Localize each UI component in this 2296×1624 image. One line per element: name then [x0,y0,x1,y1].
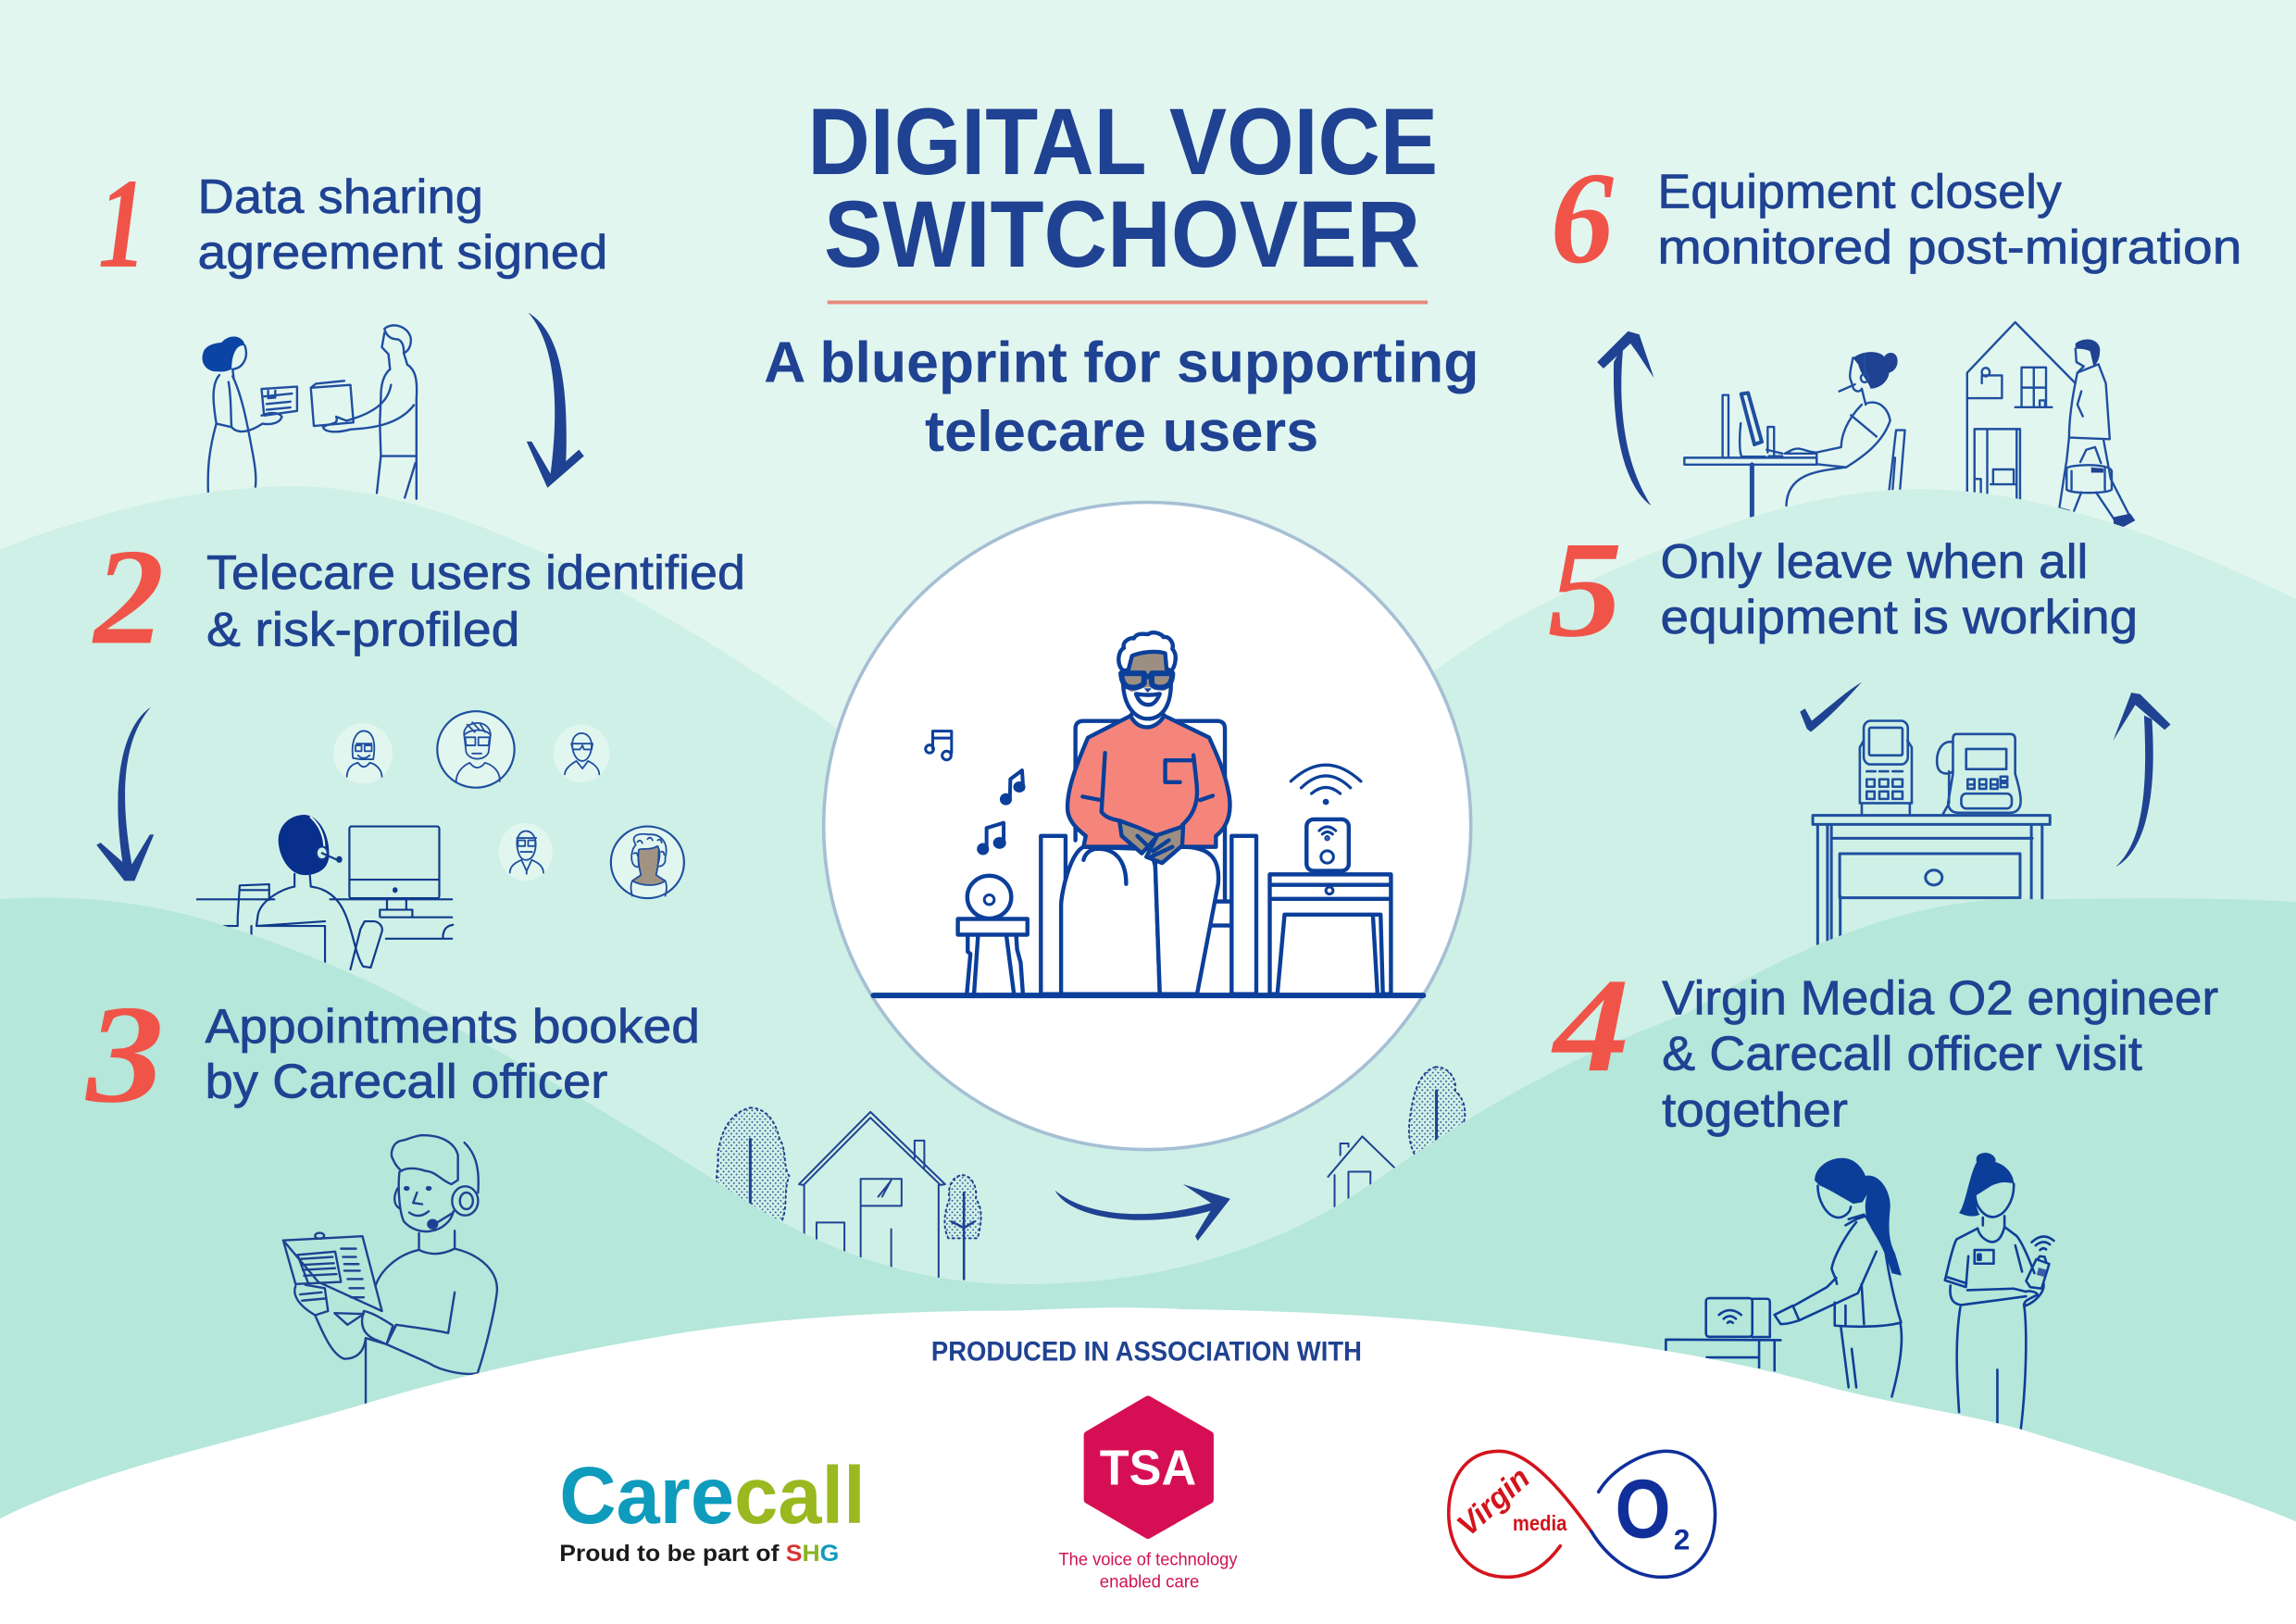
step 1 [98,153,607,295]
icon: handset base unit [1860,720,1912,815]
arrow: step 2 to step 3 [96,707,154,881]
illustration: seated man with speaker and hub [873,632,1423,995]
icon: speaker on stool [958,876,1028,994]
armchair [1041,721,1256,994]
footer: white curve [0,1307,2296,1624]
avatar: man with curly hair [437,711,515,788]
step 1: agreement signed [198,226,607,280]
icon: large tree [717,1107,789,1226]
step 3: 3 [84,976,164,1131]
logo: Virgin Media O2: O [1616,1463,1671,1556]
step 4 [1551,951,2218,1137]
floor line [873,993,1423,998]
figure: engineer with ponytail [1666,1158,1902,1396]
panel: central circle with seated man [824,502,1471,1150]
legs [1061,847,1160,994]
step 6: monitored post-migration [1657,221,2241,275]
hill layer: front green [0,897,2296,1624]
logo: TSA [1059,1400,1238,1592]
step 6 [1551,144,2241,291]
step 6: Equipment closely [1657,166,2062,219]
step 3: by Carecall officer [205,1055,607,1108]
step 5: Only leave when all [1661,535,2088,589]
jumper [1067,716,1229,847]
icon: music notes [926,731,1023,853]
step 2: & risk-profiled [206,603,519,656]
illustration: telecare users avatars [333,711,684,898]
illustration: engineer and carecall officer [1666,1153,2053,1429]
subtitle: telecare users [925,400,1318,464]
step 5: equipment is working [1661,591,2138,644]
logo: Virgin Media O2 [1449,1451,1716,1577]
step 4: together [1662,1083,1848,1137]
avatar: bald man with glasses [554,725,609,782]
logo: TSA: TSA [1100,1441,1196,1496]
step 4: Virgin Media O2 engineer [1662,971,2218,1025]
title [807,89,1438,287]
icon: hub on side table with wifi [1270,765,1391,994]
illustration: village with house and trees [717,1107,981,1279]
step 2 [92,521,745,673]
icon: brush tick mark [1800,682,1862,732]
step 1: 1 [98,153,146,295]
step 3 [84,976,700,1131]
arrow: step 6 upward [1597,331,1654,506]
step 5 [1548,514,2138,666]
step 1: Data sharing [198,170,483,224]
illustration: monitoring operator and engineer leaving house [1684,322,2135,529]
logo: TSA: enabled care [1100,1571,1199,1592]
arrow: step 4 to step 5 upward [2114,693,2170,867]
title: SWITCHOVER [824,181,1420,287]
avatar: woman with glasses [333,723,393,783]
subtitle: A blueprint for supporting [764,331,1479,394]
step 3: Appointments booked [205,1000,700,1054]
jumper details [1082,753,1213,825]
step 4: & Carecall officer visit [1662,1027,2142,1081]
subtitle [764,331,1479,464]
figure: officer holding device [1945,1153,2053,1429]
arrow: curved arrow between houses [1055,1184,1230,1241]
illustration: phone devices on side table [1813,720,2050,944]
illustration: two people exchanging documents [202,325,417,499]
illustration: operator with headset and clipboard [283,1135,497,1404]
illustration: small house and tree on right [1328,1067,1465,1207]
icon: house [799,1112,945,1278]
neck and head [1130,709,1165,727]
icon: desk telephone [1937,734,2021,814]
illustration: call handler at desk [197,815,453,969]
avatar: man with beard [499,823,553,881]
hill layer: middle green [0,486,2296,1624]
step 2: 2 [92,521,164,673]
logo: Virgin Media O2: media [1513,1511,1567,1535]
step 5: 5 [1548,514,1622,666]
logo: Carecall: Carecall [559,1451,866,1541]
title: DIGITAL VOICE [807,89,1438,194]
step 4: 4 [1551,951,1629,1100]
logo: Virgin Media O2: 2 [1674,1522,1690,1555]
logo: Virgin Media O2: Virgin [1451,1461,1537,1543]
footer heading: PRODUCED IN ASSOCIATION WITH [931,1337,1362,1367]
icon: side table [1813,816,2050,944]
step 2: Telecare users identified [206,546,745,600]
logo: Carecall: Proud to be part of SHG [559,1541,839,1567]
divider [828,301,1428,304]
step 6: 6 [1551,144,1615,291]
hands [1119,820,1157,854]
arrow: step 1 to step 2 [527,313,584,488]
icon: small tree [944,1175,981,1279]
logo: TSA: The voice of technology [1059,1550,1238,1570]
avatar: woman with curly hair [611,827,684,898]
